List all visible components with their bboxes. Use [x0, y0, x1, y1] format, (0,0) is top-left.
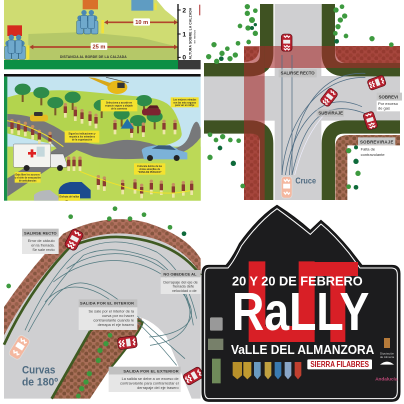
callout: salida por el exterior: contravolante para contrarrestar el	[120, 381, 179, 385]
callouts: y el sitio de evacuación	[15, 176, 41, 179]
bushes	[6, 206, 172, 288]
callout: salida por el exterior: La salida se debe a un exceso de	[122, 377, 179, 381]
callouts: de la carretera	[111, 108, 128, 111]
car: start ghost	[8, 334, 31, 361]
sierra filabres badge: SIERRA FILABRES	[310, 360, 370, 369]
spectators top	[131, 0, 153, 11]
date: 20 Y 20 DE FEBRERO	[232, 274, 363, 288]
car: inside exit	[117, 335, 138, 350]
maroon parked car	[142, 105, 161, 115]
callout: salida por el interior	[79, 299, 137, 330]
callouts: Colócate detrás de las	[137, 165, 163, 168]
sponsor logos left	[208, 317, 223, 383]
callouts: Las mejores miradas	[173, 100, 197, 102]
label: curvas de 180: de 180º	[22, 376, 58, 388]
panel: rally plate	[202, 205, 400, 401]
callout: no obedece	[161, 270, 201, 294]
callout: sobreviraje gas	[377, 93, 402, 111]
outer green edge	[4, 237, 201, 345]
callout: salirse recto: Se sale recto	[32, 248, 55, 252]
callout: sobreviraje gas: SOBREVI	[379, 94, 398, 99]
height axis: 0	[182, 54, 186, 61]
roads	[204, 4, 400, 200]
label: subviraje	[317, 109, 344, 117]
yellow rally car	[30, 112, 48, 121]
helicopter	[88, 77, 129, 94]
callouts: Disfruta del rallye	[60, 195, 80, 198]
height axis: 2	[182, 7, 186, 14]
road edges	[204, 4, 400, 200]
callout: sobreviraje contravolante: SOBREVIRAJE	[360, 139, 393, 144]
callout: sobreviraje contravolante: contravolante	[361, 152, 385, 157]
callouts: de ambulancias	[19, 180, 37, 182]
callout: salida por el interior: Se sale por el interior de la	[88, 310, 135, 314]
skid marks	[25, 242, 197, 365]
diputacion logo: de Almería	[380, 355, 394, 359]
height axis: en metros	[193, 30, 197, 43]
callout: no obedece: frenada defe	[173, 285, 194, 289]
blue rally car	[142, 145, 187, 161]
callout: salirse recto	[22, 229, 59, 254]
arrow: 25 m	[29, 43, 178, 50]
callout: salirse recto: SALIRSE RECTO	[24, 230, 57, 235]
label: subviraje: SUBVIRAJE	[318, 111, 343, 116]
spectators far	[77, 10, 98, 34]
car: outside exit	[182, 366, 204, 386]
bushes	[206, 4, 394, 189]
callout: no obedece: NO OBEDECE AL	[163, 271, 197, 276]
inner gravel verge	[52, 317, 142, 399]
red bands	[244, 46, 400, 200]
silver car	[34, 190, 58, 201]
panel: crossroads diagram	[204, 4, 402, 200]
spectators near	[5, 35, 25, 59]
arrow: 10 m: 10 m	[135, 20, 148, 26]
height axis: ALTURA SOBRE LA CALZADA	[189, 7, 193, 59]
car: oversteer upper	[367, 75, 387, 91]
blue parked car	[59, 182, 91, 201]
callouts: Sigue las indicaciones y	[69, 133, 96, 135]
callout: salida por el interior: derrapa el eje trasero	[98, 323, 134, 327]
car: understeer	[319, 87, 339, 107]
diputacion logo: Diputación	[380, 352, 394, 356]
callout: salirse recto: en la frenada.	[31, 243, 55, 247]
gravel texture	[244, 46, 400, 200]
car: straight	[64, 228, 84, 251]
yellow fences	[7, 121, 190, 193]
callouts: para ver un rallye	[175, 105, 195, 107]
callout: no obedece: Derrapaje del eje de	[163, 280, 198, 284]
plate shape	[202, 205, 400, 401]
height axis	[177, 4, 200, 61]
callout: sobreviraje gas: de gas	[378, 106, 390, 111]
inner white outline	[205, 209, 397, 399]
callout: salida por el interior: SALIDA POR EL INTERIOR	[80, 301, 134, 306]
callouts: Selecciona y accede en	[106, 103, 133, 105]
callouts: cintas amarillas de	[139, 168, 161, 171]
callout: salida por el interior: contravolante cuando le	[93, 318, 134, 322]
callouts: Deja libre los accesos	[15, 174, 41, 176]
red logo letters	[249, 261, 358, 342]
callouts	[15, 97, 199, 201]
callout: salida por el interior: curva por no hacer	[102, 314, 135, 318]
ground strip	[4, 60, 178, 69]
andalucia logo: Andalucía	[375, 377, 398, 382]
label: curvas de 180	[22, 364, 58, 388]
callout: no obedece: velocidad o de	[172, 289, 197, 293]
skid marks	[282, 55, 369, 175]
panel: spectator conduct scene	[4, 74, 201, 201]
subtitle: VaLLE DEL ALMANZORA	[231, 342, 375, 357]
callout: salirse recto: Error de cálculo	[28, 239, 55, 243]
callouts: son las más seguras	[173, 102, 197, 104]
spectators	[10, 103, 193, 198]
red sign near	[7, 25, 22, 36]
callouts: "ZONA DE PÚBLICO"	[138, 171, 162, 174]
panel: spectator safety distances	[4, 0, 201, 69]
label: salirse recto	[279, 69, 317, 77]
road surface	[4, 232, 201, 399]
trees	[15, 84, 163, 133]
arrow: 10 m	[104, 18, 178, 26]
callouts: respeta a los miembros	[69, 135, 96, 138]
car: start ghost	[281, 177, 292, 198]
road	[7, 114, 201, 197]
panel: 180 degree curves diagram	[4, 206, 204, 399]
outer gravel verge	[4, 219, 201, 335]
label: cruce: Cruce	[295, 175, 316, 185]
callout: salida por el exterior: SALIDA POR EL EXTERIOR	[123, 369, 179, 374]
municipal crests	[233, 362, 301, 379]
title: RaLLY	[232, 282, 369, 342]
distance caption: DISTANCIA AL BORDE DE LA CALZADA	[60, 55, 127, 59]
ambulance	[13, 144, 67, 171]
callout: salida por el exterior: derrapaje del eje trasero	[137, 386, 179, 390]
label: curvas de 180: Curvas	[22, 364, 55, 376]
label: salirse recto: SALIRSE RECTO	[281, 71, 315, 76]
height axis: 1	[182, 31, 186, 38]
car: oversteer lower	[363, 111, 378, 130]
car: straight	[281, 34, 292, 51]
red sign far	[83, 0, 98, 9]
arrow: 25 m: 25 m	[93, 44, 105, 50]
callout: sobreviraje contravolante: Falta de	[361, 147, 376, 152]
callouts: espacio seguro y alejado	[105, 106, 133, 108]
callout: sobreviraje gas: Por exceso	[378, 101, 399, 106]
inner bushes	[76, 333, 112, 398]
tent	[121, 119, 134, 129]
callout: sobreviraje contravolante	[358, 137, 395, 159]
callouts: de la organización	[72, 139, 93, 141]
diputacion logo	[380, 338, 394, 365]
callout: salida por el exterior	[109, 367, 181, 392]
